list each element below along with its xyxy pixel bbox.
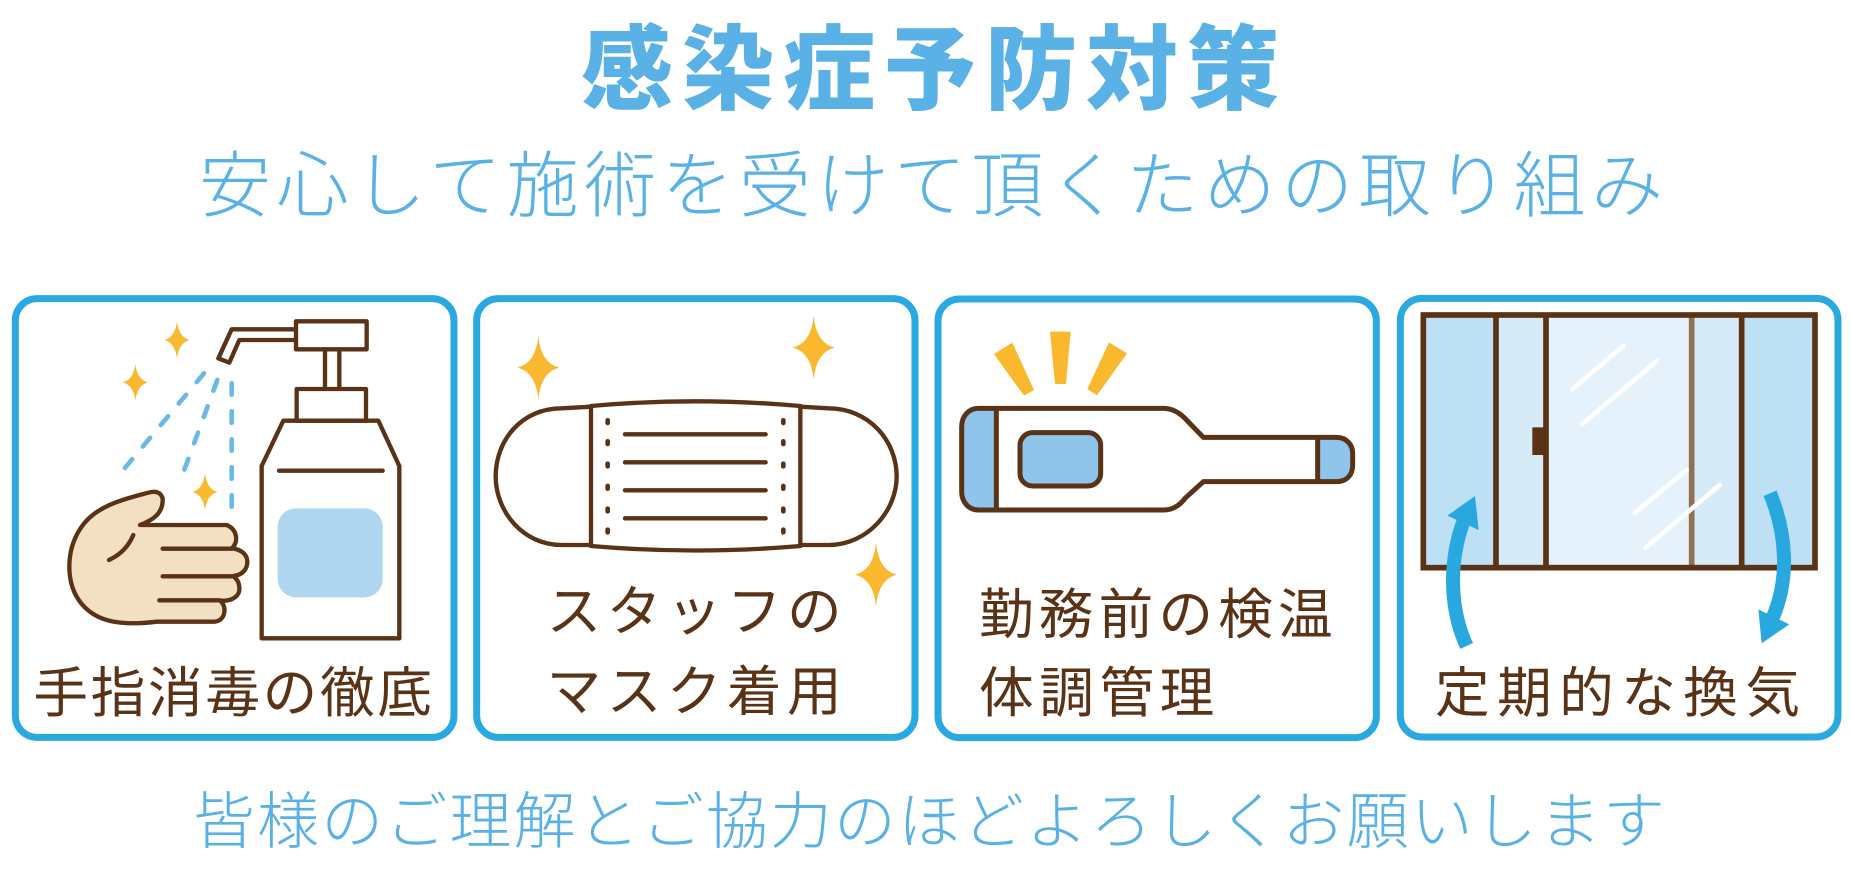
label: マスク着用 [547, 662, 842, 723]
icon: sparkles [123, 321, 218, 510]
icon: sparkles [517, 316, 897, 606]
panel: hand sanitizing [15, 299, 454, 737]
icon: signal rays [994, 332, 1127, 396]
icon: spray droplets [122, 373, 232, 511]
subtitle: 安心して施術を受けて頂くための取り組み [199, 147, 1663, 227]
closing message: 皆様のご理解とご協力のほどよろしくお願いします [193, 788, 1665, 857]
label: 勤務前の検温 [979, 584, 1333, 645]
arrow: air out [1758, 493, 1789, 643]
label: 定期的な換気 [1435, 663, 1800, 724]
panel: temperature check [938, 299, 1376, 738]
panel: ventilation [1400, 298, 1838, 737]
label: スタッフの [547, 582, 842, 643]
arrow: air in [1447, 496, 1479, 646]
icon: window [1423, 315, 1815, 568]
icon: pump bottle [218, 321, 399, 638]
label: 手指消毒の徹底 [33, 663, 432, 724]
label: 体調管理 [979, 663, 1214, 724]
icon: hand [69, 492, 247, 623]
icon: face mask [496, 401, 897, 550]
panel: staff masks [477, 299, 915, 737]
title: 感染症予防対策 [581, 20, 1279, 122]
icon: thermometer [962, 408, 1353, 510]
